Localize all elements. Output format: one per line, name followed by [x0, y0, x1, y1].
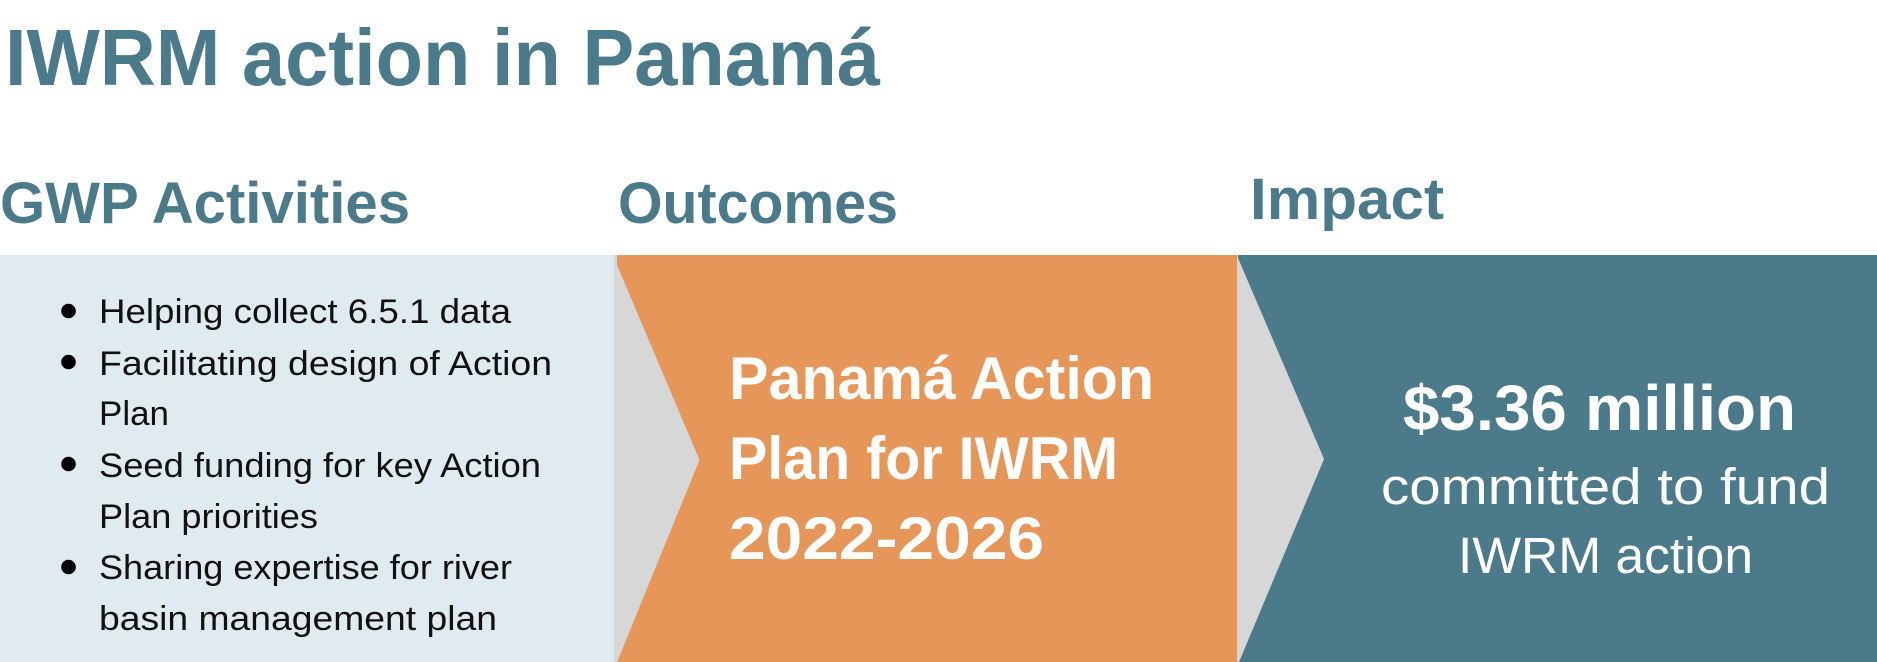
bullet: Action Plan design — [61, 345, 552, 433]
arrow: activities to outcomes — [614, 255, 700, 662]
bullet: seed funding: Seed funding for key Action — [99, 447, 541, 485]
bullet list — [61, 293, 552, 638]
outcome text: 2022-2026 — [729, 505, 1044, 572]
bullet: river basin expertise: Sharing expertise for river — [99, 549, 512, 587]
bullet: Action Plan design: Plan — [99, 395, 169, 433]
arrow: outcomes to impact — [1237, 255, 1324, 662]
bullet: Action Plan design: Facilitating design of Action — [99, 345, 552, 383]
bullet: river basin expertise: basin management plan — [99, 600, 497, 638]
title: IWRM action in Panamá — [5, 13, 880, 102]
panel: impact — [1238, 255, 1877, 662]
bullet: seed funding: Plan priorities — [99, 498, 318, 536]
heading: Outcomes: Outcomes — [618, 171, 898, 236]
impact description: committed to fund — [1381, 458, 1830, 515]
bullet: 6.5.1 data: Helping collect 6.5.1 data — [99, 293, 511, 331]
outcome text: Plan for IWRM — [729, 425, 1118, 492]
panel: GWP activities — [0, 255, 614, 662]
panel: outcomes — [617, 255, 1237, 662]
outcome text: Panamá Action — [729, 345, 1154, 412]
bullet: river basin expertise — [61, 549, 512, 638]
heading: Impact: Impact — [1250, 167, 1444, 232]
bullet: seed funding — [61, 447, 541, 536]
impact figure: $3.36 million — [1403, 372, 1796, 444]
impact description: IWRM action — [1458, 527, 1753, 584]
heading: GWP Activities: GWP Activities — [0, 171, 410, 236]
